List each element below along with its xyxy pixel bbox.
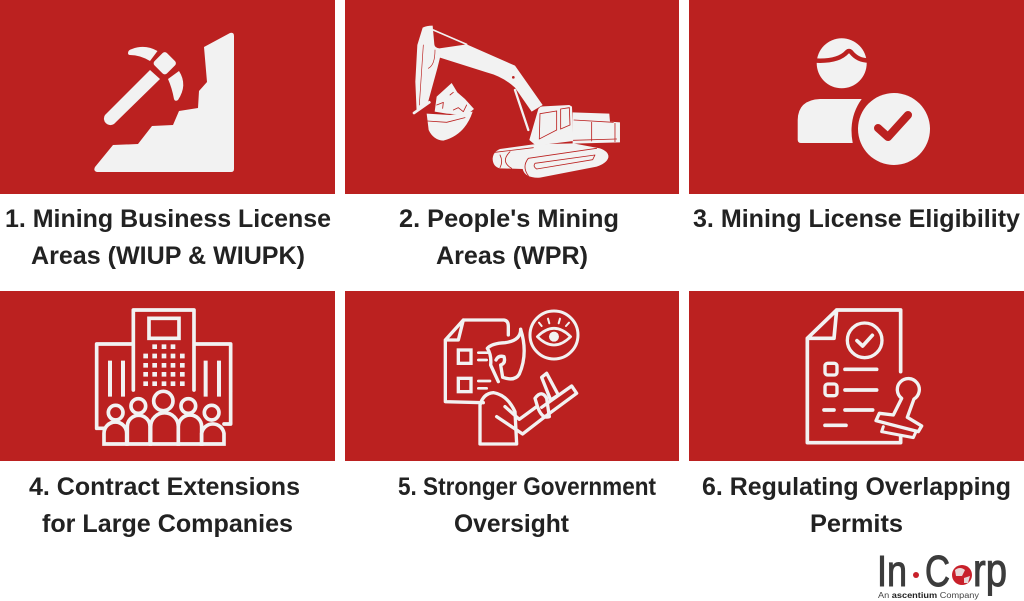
icon: pickaxe and stepped mountain — [94, 33, 234, 172]
label: heading 6: Permits — [810, 510, 903, 538]
label: heading 2: 2. People's Mining — [399, 205, 619, 233]
icon: excavator — [414, 26, 620, 178]
panel: mining business license areas — [0, 0, 335, 270]
label: heading 3: 3. Mining License Eligibility — [693, 205, 1020, 233]
label: heading 2 — [399, 205, 619, 270]
panel: stronger government oversight — [345, 291, 679, 538]
label: heading 5: 5. Stronger Government — [398, 473, 657, 501]
label: heading 1 — [5, 205, 331, 270]
label: heading 6: 6. Regulating Overlapping — [702, 473, 1011, 501]
logo: InCorp: rp — [973, 544, 1007, 596]
label: heading 4: for Large Companies — [42, 510, 293, 538]
panel: regulating overlapping permits — [689, 291, 1024, 538]
logo: InCorp: An ascentium Company — [878, 591, 979, 600]
label: heading 1: 1. Mining Business License — [5, 205, 331, 233]
icon: globe — [952, 565, 972, 585]
logo: InCorp: C — [925, 547, 950, 596]
icon: document with stamp — [807, 310, 922, 443]
icon: office buildings and group of people — [97, 310, 231, 444]
label: heading 2: Areas (WPR) — [436, 242, 588, 270]
panel: people's mining areas — [345, 0, 679, 270]
panel: mining license eligibility — [689, 0, 1024, 233]
logo: InCorp: In — [877, 547, 907, 596]
label: heading 5 — [398, 473, 657, 538]
label: heading 4 — [29, 473, 300, 538]
icon: inspector with checklist and eye — [445, 311, 578, 444]
logo: InCorp — [877, 544, 1007, 600]
icon: person with checkmark — [798, 38, 930, 165]
label: heading 4: 4. Contract Extensions — [29, 473, 300, 501]
label: heading 5: Oversight — [454, 510, 570, 538]
label: heading 1: Areas (WIUP & WIUPK) — [31, 242, 305, 270]
panel: contract extensions — [0, 291, 335, 538]
label: heading 6 — [702, 473, 1011, 538]
